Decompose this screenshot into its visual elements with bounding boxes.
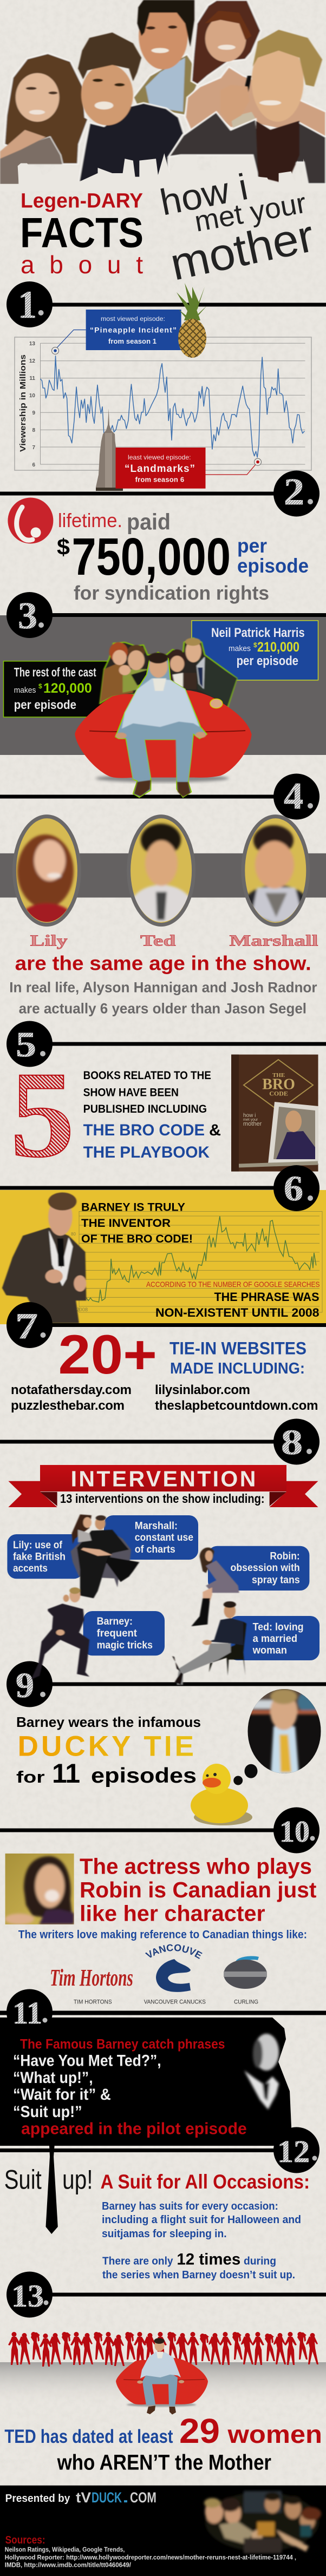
callout: Neil Patrick Harris salary: Neil Patrick Harris	[211, 626, 305, 640]
section number 7: 7	[15, 1305, 38, 1346]
names: Ted	[140, 932, 175, 950]
figure: couple on armchair	[71, 1514, 139, 1598]
section number 3	[6, 592, 326, 638]
line chart: viewership in millions: 8	[32, 428, 35, 433]
icon: necktie	[45, 2146, 58, 2234]
names	[30, 932, 318, 950]
logo: Vancouver Canucks: VANCOUVER	[145, 1944, 203, 1959]
text: a suit for all occasions	[101, 2171, 310, 2281]
portrait: Lily	[14, 817, 79, 934]
text: ducky tie: DUCKY TIE	[18, 1731, 194, 1763]
section number 5: 5	[16, 1025, 36, 1064]
text: ducky tie: Barney wears the infamous	[16, 1714, 201, 1730]
callout: Marshall: Marshall:	[135, 1521, 178, 1532]
text: lifetime paid $750,000 per episode: 750,000	[71, 527, 231, 586]
text: catch phrases	[13, 2037, 247, 2138]
text: Barney inventor of the Bro Code: THE PHRASE WAS	[214, 1290, 320, 1304]
figures: cast in poses	[31, 1514, 246, 1685]
photo: Barney	[168, 30, 326, 184]
icon: rubber duck	[191, 1764, 252, 1825]
section number 3: 3	[18, 595, 37, 637]
book: The Bro Code: THE	[272, 1072, 285, 1079]
line chart: viewership in millions: 11	[29, 376, 35, 382]
presented by: COM	[130, 2489, 157, 2506]
callout: Ted: a married	[253, 1633, 297, 1645]
section number 12: 12	[277, 2134, 310, 2169]
section number 10: 10	[279, 1815, 310, 1849]
callout: Barney	[83, 1611, 165, 1655]
line chart: viewership in millions	[15, 337, 311, 470]
callout: Ted: Ted: loving	[253, 1622, 304, 1633]
text: books: SHOW HAVE BEEN	[83, 1086, 179, 1099]
section number 2	[0, 471, 320, 516]
section number 10	[0, 1808, 320, 1853]
text: Ted has dated 29 women	[4, 2411, 322, 2474]
text: a suit for all occasions: during	[244, 2255, 276, 2267]
callout: rest of the cast salary: per episode	[14, 698, 76, 712]
text: a suit for all occasions: 12 times	[177, 2250, 240, 2268]
book: The Bro Code: how i	[243, 1113, 256, 1119]
line chart: viewership in millions: 6	[32, 462, 35, 468]
presented by: .	[122, 2489, 129, 2506]
text: Barney inventor of the Bro Code: NON-EXISTENT UNTIL 2008	[155, 1306, 320, 1319]
title: how i met your mother	[157, 166, 318, 290]
panel: portraits band	[0, 853, 326, 897]
callout: rest of the cast salary: The rest of the cast	[14, 665, 96, 679]
line chart: viewership in millions: 13	[29, 341, 35, 347]
callout: Lily: accents	[13, 1563, 48, 1574]
text: catch phrases: “What up!”,	[13, 2069, 93, 2087]
section number 11 line	[0, 2011, 326, 2015]
line chart: viewership in millions: 7	[32, 445, 35, 451]
figure: Ted on chair	[172, 1601, 246, 1685]
text: ducky tie: 11	[52, 1758, 80, 1789]
text: a suit for all occasions: Barney has suits for every occasion:	[102, 2200, 278, 2212]
text: 20+ tie-in websites: theslapbetcountdown.com	[155, 1398, 318, 1413]
text: Barney inventor of the Bro Code	[81, 1201, 320, 1319]
Ted outline	[115, 652, 207, 797]
text: books: BOOKS RELATED TO THE	[83, 1069, 211, 1082]
callout: Robin	[208, 1546, 309, 1591]
text: catch phrases: “Wait for it” &	[13, 2086, 111, 2104]
text: same age	[9, 952, 317, 1017]
callout: rest of the cast salary: 120,000	[43, 681, 92, 696]
book: The Bro Code: met your	[243, 1118, 258, 1122]
section number 6 badge: 6	[284, 1169, 303, 1208]
text: same age: are actually 6 years older than Jason Segel	[19, 1001, 307, 1017]
text: catch phrases: “Suit up!”	[13, 2103, 82, 2121]
text: Barney inventor of the Bro Code: THE INVENTOR	[81, 1217, 171, 1230]
text: books: &	[209, 1121, 221, 1139]
header cast photo	[0, 0, 326, 191]
text: catch phrases: “Have You Met Ted?”,	[13, 2052, 161, 2069]
section number 13: 13	[11, 2278, 44, 2314]
photo: Barney in black and white	[244, 2034, 279, 2110]
callout: Marshall	[104, 1515, 198, 1560]
photo: Robin	[5, 1854, 74, 1924]
text: books: THE BRO CODE	[83, 1121, 205, 1139]
logo: lifetime	[8, 498, 53, 543]
portrait: Barney thought bubble with ducky tie	[233, 1688, 322, 1785]
logo: Tim Hortons	[50, 1964, 133, 2006]
cast behind the couch	[100, 638, 237, 707]
text: 20+ tie-in websites: TIE-IN WEBSITES	[169, 1339, 307, 1358]
text: Ted has dated 29 women: TED has dated at least	[4, 2426, 173, 2447]
text: 20+ tie-in websites	[11, 1324, 318, 1413]
text: 20+ tie-in websites: 20+	[58, 1324, 157, 1385]
line chart: viewership in millions: 12	[29, 358, 35, 364]
names: Lily	[30, 932, 68, 950]
text: lifetime paid $750,000 per episode: paid	[127, 509, 171, 535]
photo: Ted	[78, 32, 184, 182]
callout: Neil Patrick Harris salary: $	[253, 641, 257, 649]
portrait: Ted	[128, 814, 194, 926]
figure: Barney in suit	[2, 1192, 86, 1323]
callout: most viewed episode: “Pineapple Incident”	[90, 326, 177, 334]
couch	[75, 690, 252, 778]
floor shadow	[0, 2362, 326, 2407]
callout: least viewed episode: “Landmarks”	[125, 463, 195, 475]
presented by: tV	[76, 2489, 91, 2506]
photo: Marshall	[133, 0, 198, 115]
section number 6 badge	[273, 1165, 320, 1211]
callout: Neil Patrick Harris salary: 210,000	[257, 640, 299, 655]
line chart: viewership in millions: 10	[29, 393, 35, 399]
text: a suit for all occasions: including a flight suit for Halloween and	[102, 2214, 301, 2226]
callout: rest of the cast salary: $	[38, 682, 42, 690]
text: same age: are the same age in the show.	[15, 952, 311, 974]
text: ducky tie	[16, 1714, 201, 1789]
callout: least viewed episode: from season 6	[135, 476, 184, 484]
text: lifetime paid $750,000 per episode	[57, 509, 309, 604]
panel: catch phrases	[0, 2018, 291, 2146]
text: Barney inventor of the Bro Code: BARNEY IS TRULY	[81, 1201, 185, 1214]
sources: Hollywood Reporter: http://www.hollywoodreporter.com/news/mother-reruns-nest-at-lifetime-119744 ,	[5, 2554, 296, 2561]
callout: most viewed episode	[52, 310, 181, 354]
callout: Robin: obsession with	[231, 1562, 300, 1574]
callout: rest of the cast salary: makes	[14, 686, 36, 695]
figure: Robin seated	[191, 1548, 239, 1626]
names: Marshall	[230, 932, 318, 950]
chart: Bro Code Google searches: 2008	[76, 1307, 88, 1313]
skyline cut-out	[0, 153, 326, 191]
text: lifetime paid $750,000 per episode: for syndication rights	[74, 582, 269, 604]
callout: Marshall: constant use	[135, 1532, 193, 1543]
presented by: DUCK	[92, 2489, 122, 2506]
banner: intervention: 13 interventions on the show including:	[60, 1491, 264, 1506]
callout: Ted	[229, 1616, 320, 1660]
section number 5	[6, 1021, 326, 1067]
text: 20+ tie-in websites: lilysinlabor.com	[155, 1383, 250, 1397]
text: Robin is Canadian: Robin is Canadian just	[80, 1877, 317, 1902]
callout: Lily: fake British	[13, 1552, 66, 1563]
text: 20+ tie-in websites: notafathersday.com	[11, 1383, 132, 1397]
callout: Barney: magic tricks	[97, 1640, 153, 1651]
title: Legen-DARY facts about: about	[21, 251, 143, 279]
photo: Lily	[185, 0, 326, 137]
callout: rest of the cast salary	[3, 661, 112, 717]
panel: grey salary band	[0, 615, 326, 755]
big number five: 5	[10, 1047, 75, 1183]
text: Robin is Canadian: like her character	[80, 1901, 265, 1926]
text: 20+ tie-in websites: puzzlesthebar.com	[11, 1398, 125, 1413]
presented by: Presented by	[5, 2493, 70, 2505]
section number 8: 8	[281, 1423, 303, 1462]
icon: curling stone: CURLING	[234, 1999, 258, 2006]
section number 4	[0, 774, 320, 819]
Ted figure	[116, 653, 206, 797]
logo: Tim Hortons: TIM HORTONS	[74, 1999, 112, 2006]
text: suit up: up!	[62, 2165, 93, 2195]
callout: most viewed episode: from season 1	[108, 337, 157, 345]
text: lifetime paid $750,000 per episode: per	[237, 535, 267, 557]
text: Ted has dated 29 women: who AREN’T the Mother	[57, 2450, 271, 2474]
silhouettes: 29 women	[8, 2332, 318, 2367]
callout: Barney: Barney:	[97, 1616, 133, 1627]
text: catch phrases: The Famous Barney catch phrases	[20, 2037, 225, 2052]
text: suit up: Suit	[4, 2165, 42, 2195]
hand on couch	[210, 699, 223, 708]
book: The Bro Code	[231, 1055, 318, 1172]
text: books: PUBLISHED INCLUDING	[83, 1103, 207, 1115]
section number 6	[0, 1186, 297, 1190]
figure: Barney seated with phone	[31, 1587, 89, 1679]
sources	[5, 2534, 296, 2569]
book: The Bro Code: CODE	[269, 1090, 288, 1098]
icon: curling stone	[224, 1956, 267, 2006]
chart: Bro Code Google searches: 80	[71, 1232, 76, 1237]
sources: Neilson Ratings, Wikipedia, Google Trends,	[5, 2547, 125, 2553]
callout: Lily: Lily: use of	[13, 1540, 63, 1551]
text: same age: In real life, Alyson Hannigan and Josh Radnor	[9, 980, 317, 996]
book: The Bro Code: BRO	[262, 1076, 295, 1093]
banner: intervention	[8, 1465, 318, 1507]
text: lifetime paid $750,000 per episode: $	[57, 534, 70, 560]
callout: Lily	[7, 1534, 83, 1579]
callout: least viewed episode	[116, 448, 261, 489]
title: Legen-DARY facts about	[20, 189, 144, 279]
text: books	[83, 1069, 221, 1161]
callout: Neil Patrick Harris salary: per episode	[237, 654, 298, 668]
photo: cast toasting	[204, 2491, 321, 2553]
logo: Vancouver Canucks: VANCOUVER CANUCKS	[144, 1999, 206, 2006]
text: ducky tie: for	[16, 1767, 45, 1786]
text: ducky tie: episodes	[91, 1764, 197, 1788]
text: Robin is Canadian: The actress who plays	[80, 1854, 312, 1879]
section number 12	[0, 2127, 320, 2173]
illustration: cast on red lips couch	[75, 638, 252, 797]
text: Robin is Canadian	[18, 1854, 317, 1941]
title: Legen-DARY facts about: FACTS	[20, 209, 144, 257]
text: catch phrases: appeared in the pilot episode	[21, 2119, 247, 2138]
section number 8	[0, 1419, 320, 1464]
banner: intervention: INTERVENTION	[71, 1467, 256, 1491]
callout: Robin: spray tans	[252, 1575, 300, 1586]
sources: IMDB, http://www.imdb.com/title/tt0460649/	[5, 2562, 132, 2569]
chart: Bro Code Google searches	[71, 1211, 322, 1313]
section number 1	[6, 281, 326, 327]
panel: footer	[0, 2486, 326, 2576]
text: a suit for all occasions: suitjamas for sleeping in.	[102, 2228, 227, 2240]
callout: Ted: woman	[252, 1645, 287, 1657]
illustration: Ted alone on lips couch	[116, 2338, 208, 2415]
callout: least viewed episode: least viewed episode:	[128, 454, 191, 461]
text: lifetime paid $750,000 per episode: lifetime.	[58, 509, 122, 531]
section number 2: 2	[284, 471, 304, 513]
title: how i met your mother: mother	[166, 210, 318, 290]
text: a suit for all occasions: There are only	[102, 2255, 173, 2267]
title: how i met your mother: met your	[192, 187, 309, 238]
text: 20+ tie-in websites: MADE INCLUDING:	[170, 1360, 305, 1377]
section number 11	[6, 1989, 53, 2035]
text: Robin is Canadian: The writers love making reference to Canadian things like:	[18, 1929, 307, 1941]
logo: Vancouver Canucks	[144, 1944, 206, 2006]
callout: Marshall: of charts	[135, 1544, 175, 1555]
callout: Robin: Robin:	[270, 1551, 300, 1562]
sources: Sources:	[5, 2534, 45, 2546]
icon: pineapple	[177, 283, 207, 358]
text: Barney inventor of the Bro Code: OF THE BRO CODE!	[81, 1233, 193, 1245]
line chart: viewership in millions: 9	[32, 410, 35, 416]
callout: most viewed episode: most viewed episode:	[101, 315, 165, 323]
section number 7	[6, 1302, 326, 1348]
callout: Neil Patrick Harris salary	[192, 621, 318, 680]
callout: Barney: frequent	[97, 1628, 138, 1639]
section number 4: 4	[284, 776, 303, 817]
line chart: viewership in millions: Viewership in Millions	[18, 354, 28, 452]
text: Ted has dated 29 women: women	[227, 2420, 322, 2448]
presented by	[5, 2489, 157, 2506]
text: books: THE PLAYBOOK	[83, 1144, 210, 1161]
portrait: Marshall	[243, 814, 309, 926]
icon: Empire State Building	[96, 409, 123, 491]
photo: Robin	[0, 53, 88, 184]
section number 9	[6, 1661, 326, 1707]
title: how i met your mother: how i	[157, 166, 251, 224]
text: a suit for all occasions: the series when Barney doesn’t suit up.	[102, 2269, 295, 2281]
text: suit up	[4, 2165, 93, 2195]
section number 1: 1	[18, 283, 37, 326]
logo: Tim Hortons: Tim Hortons	[50, 1964, 133, 1991]
title: Legen-DARY facts about: Legen-DARY	[21, 189, 143, 212]
book: The Bro Code: mother	[243, 1121, 262, 1127]
callout: Neil Patrick Harris salary: makes	[229, 644, 251, 653]
section number 11: 11	[12, 1995, 42, 2030]
section number 9: 9	[16, 1666, 34, 1705]
text: lifetime paid $750,000 per episode: episode	[237, 555, 309, 577]
text: Ted has dated 29 women: 29	[179, 2411, 220, 2450]
section number 13	[6, 2272, 326, 2317]
panel: yellow Google Trends band	[0, 1190, 326, 1324]
